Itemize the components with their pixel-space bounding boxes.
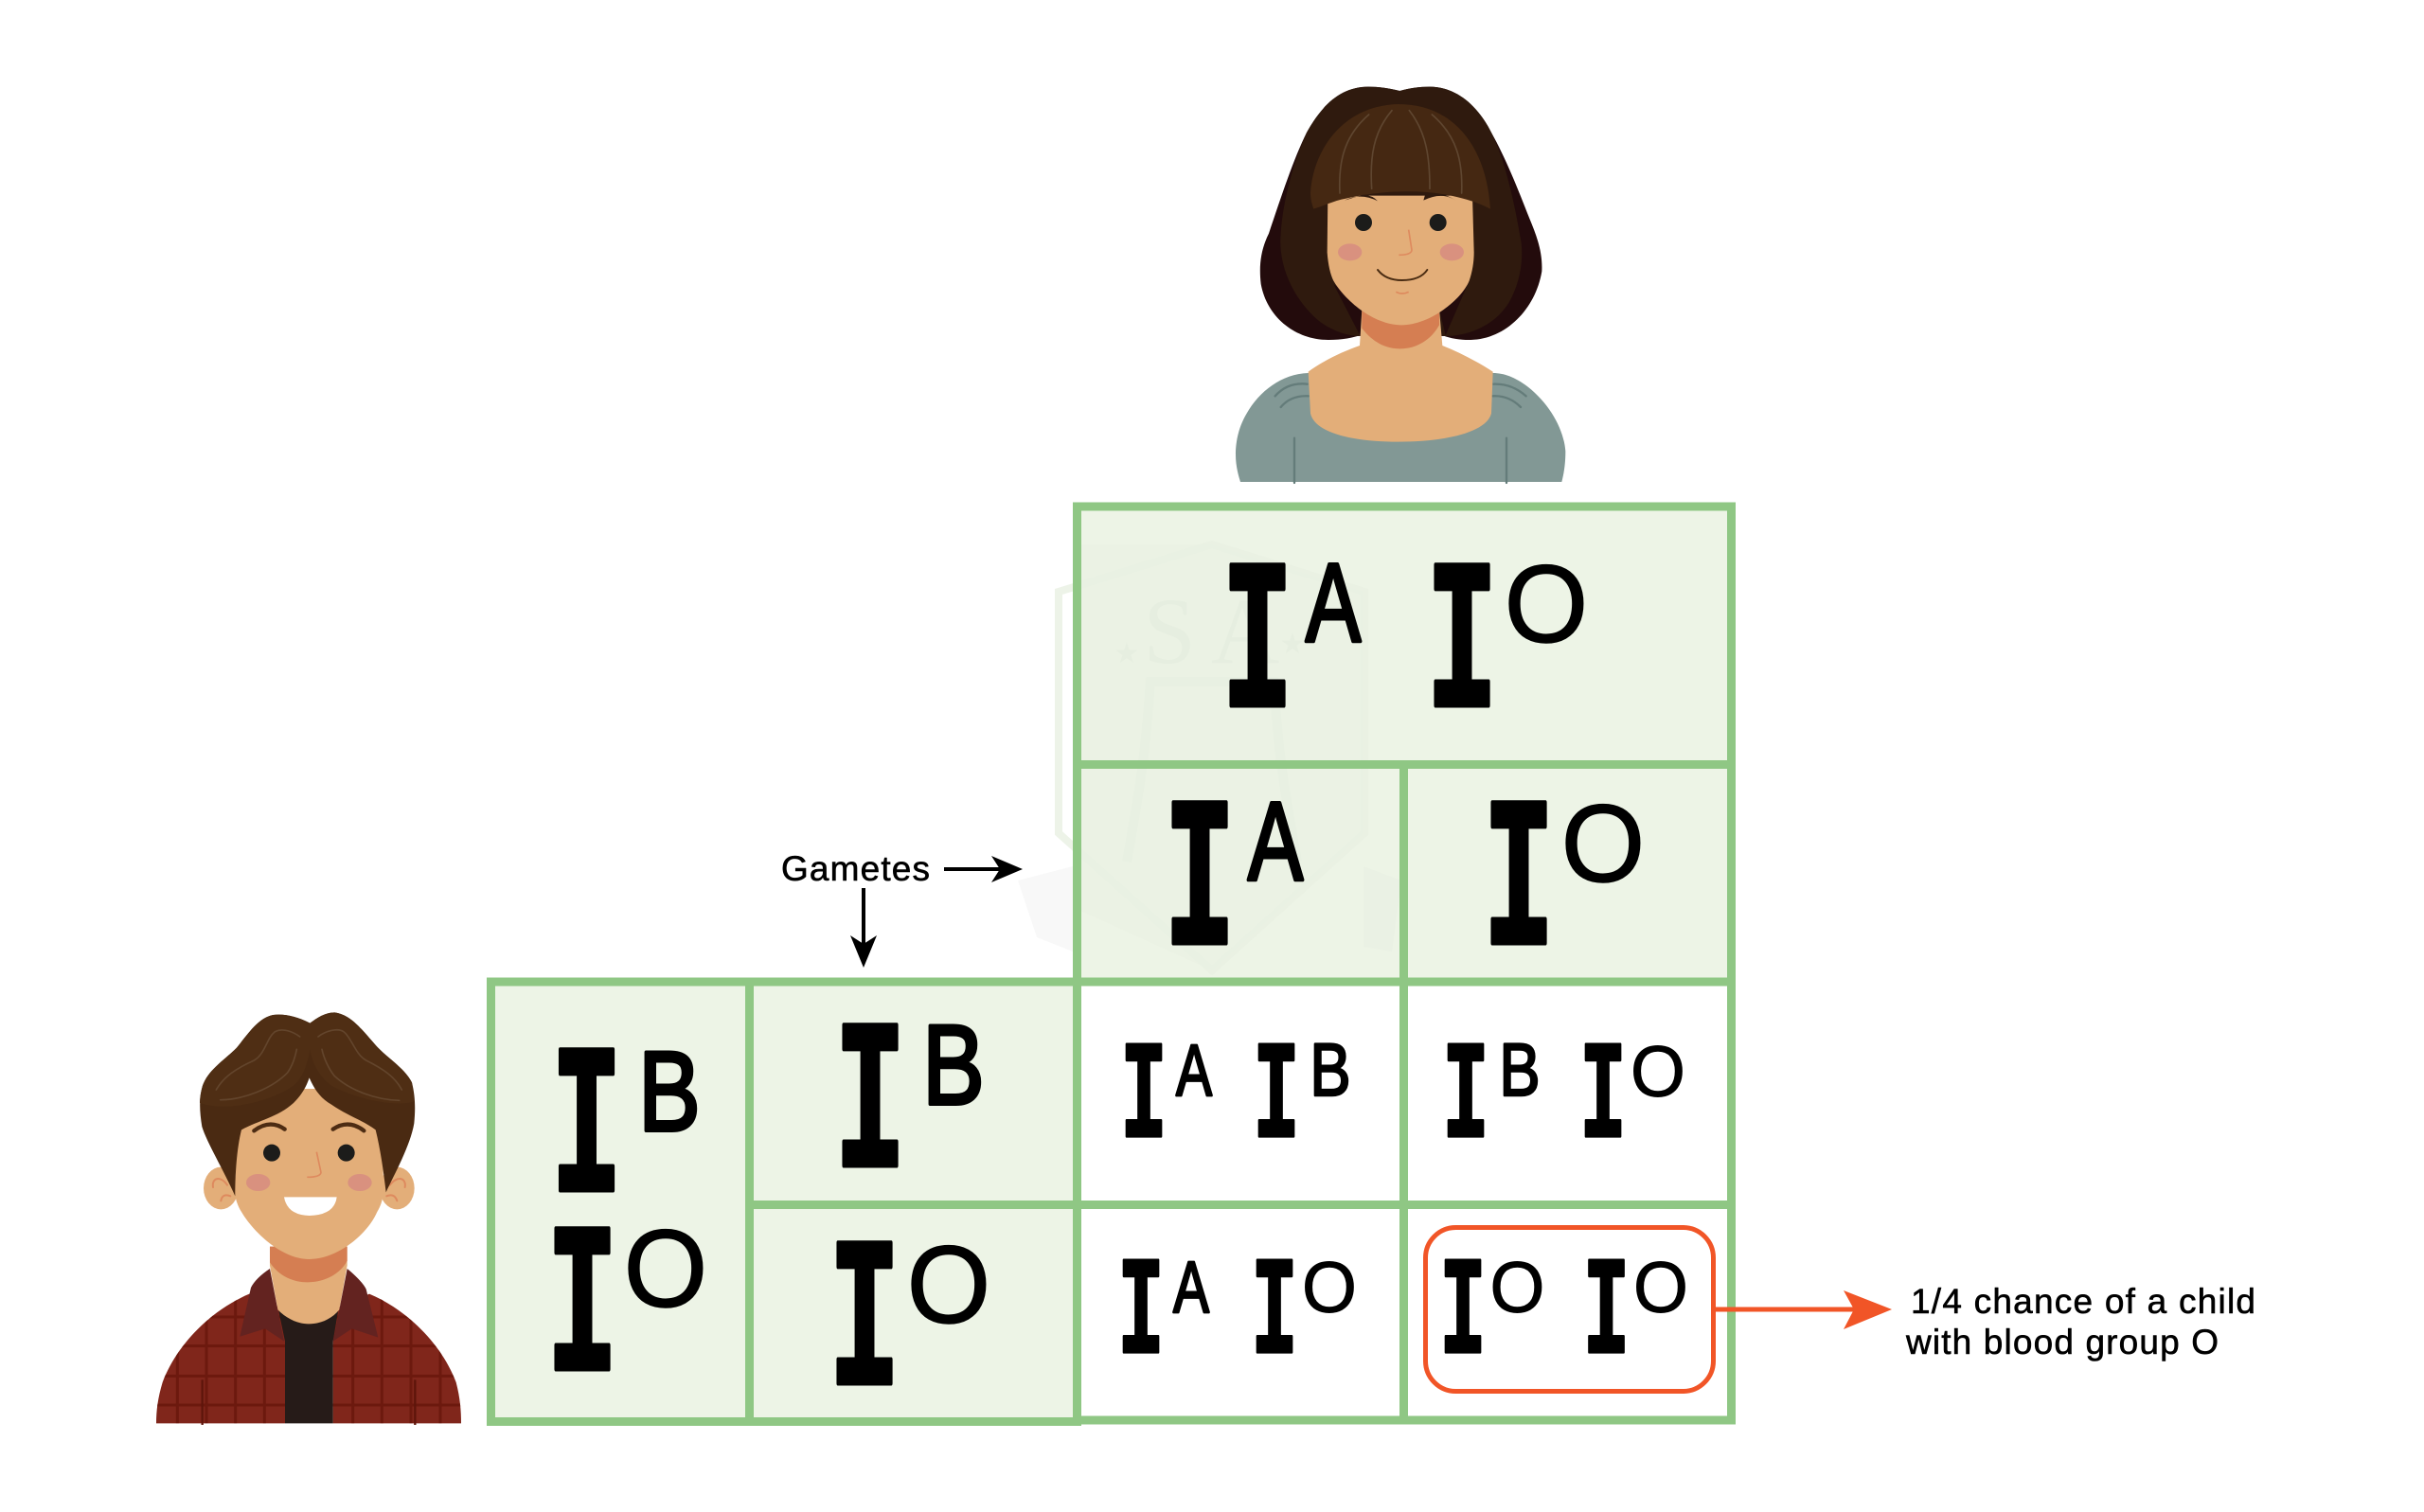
callout: chance text [1905,1282,2255,1361]
cell: offspring IA IO: A [1173,1248,1210,1328]
cell: offspring IO IO: O [1633,1247,1688,1327]
father cheeks [246,1174,372,1191]
cell: offspring IB IO: B [1499,1029,1541,1112]
watermark: faint crest: ★ [1114,637,1139,670]
grid: green Punnett lines [490,507,1732,1422]
father nose [307,1152,321,1177]
cell: father gamete IB: B [922,1003,985,1129]
cell: mother genotype IA IO: I [1426,527,1498,770]
mother smile [1378,270,1427,280]
cell: offspring IO IO: O [1490,1247,1544,1327]
cell: mother gamete IA [1164,765,1304,1007]
arrow: gametes right [944,856,1023,882]
watermark: faint crest: S [1143,578,1196,684]
cell: father genotype IB IO: I [551,1012,622,1254]
mother face [1328,196,1474,325]
cell: offspring IA IB: A [1176,1031,1213,1112]
cell: offspring IA IO: I [1251,1236,1298,1394]
father eyebrows [254,1125,364,1130]
father neck [270,1247,348,1324]
father face [235,1089,383,1259]
cell: offspring IB IO: O [1631,1031,1685,1112]
cell: mother gamete IA: I [1164,765,1236,1007]
father shirt [156,1293,461,1425]
cell: father genotype IB IO [546,1012,707,1433]
cell: offspring IA IO: O [1302,1247,1357,1327]
cell: mother genotype IA IO [1221,527,1588,770]
cell: offspring IA IO [1117,1236,1357,1394]
label: Gametes: Gametes [781,849,930,888]
cell: offspring IA IB [1120,1021,1351,1178]
father hair [200,1012,415,1196]
callout: chance text: with blood group O [1905,1323,2219,1361]
father collar [240,1269,378,1342]
mother neck shadow [1362,310,1439,348]
illustration: father [152,1012,467,1425]
mother neck and chest [1309,310,1493,442]
cell: father genotype IB IO: O [624,1208,707,1330]
panel: gamete cells background [490,507,1732,1421]
callout: chance text: 1/4 chance of a child [1911,1282,2255,1321]
cell: offspring IA IB: B [1310,1029,1351,1112]
cell: offspring IO IO: I [1439,1236,1487,1394]
cell: mother genotype IA IO: O [1505,543,1588,666]
father t-shirt [278,1309,338,1423]
cell: father gamete IO: O [907,1224,990,1346]
cell: father genotype IB IO: B [638,1029,701,1155]
mother fringe [1310,104,1490,209]
father mouth [284,1197,337,1216]
cell: offspring IB IO: I [1579,1021,1627,1178]
cell: offspring IB IO: I [1442,1021,1489,1178]
mother cheeks [1338,243,1464,260]
cell: father gamete IB: I [834,987,906,1230]
cell: offspring IO IO [1439,1236,1688,1394]
cell: offspring IA IB: I [1120,1021,1167,1178]
cell: mother gamete IO [1483,765,1645,1007]
father neck shadow [270,1247,348,1282]
illustration: mother [1236,87,1565,483]
cell: father gamete IO: I [829,1205,900,1448]
cell: mother gamete IO: O [1561,783,1645,905]
mother eyes [1355,214,1447,231]
cell: father genotype IB IO: I [546,1191,618,1433]
mother nose and chin [1396,230,1412,294]
arrow: red to callout [1714,1290,1892,1329]
cell: mother gamete IA: A [1248,778,1304,903]
father eyes [263,1145,355,1162]
watermark: faint crest: A [1211,578,1279,684]
highlight: red rounded box [1426,1227,1714,1392]
father ears [204,1167,415,1209]
cell: offspring IA IO: I [1117,1236,1165,1394]
cell: offspring IB IO [1442,1021,1685,1178]
cell: offspring IO IO: I [1583,1236,1630,1394]
cell: mother genotype IA IO: I [1221,527,1293,770]
mother shirt [1236,373,1565,483]
cell: offspring IA IB: I [1253,1021,1300,1178]
watermark: faint crest [1018,544,1401,970]
cell: father gamete IB [834,987,985,1230]
mother hair [1260,87,1542,340]
cell: father gamete IO [829,1205,990,1448]
cell: mother gamete IO: I [1483,765,1555,1007]
cell: mother genotype IA IO: A [1306,540,1362,665]
arrow: gametes down [850,888,877,968]
watermark: faint crest: ★ [1280,628,1305,661]
